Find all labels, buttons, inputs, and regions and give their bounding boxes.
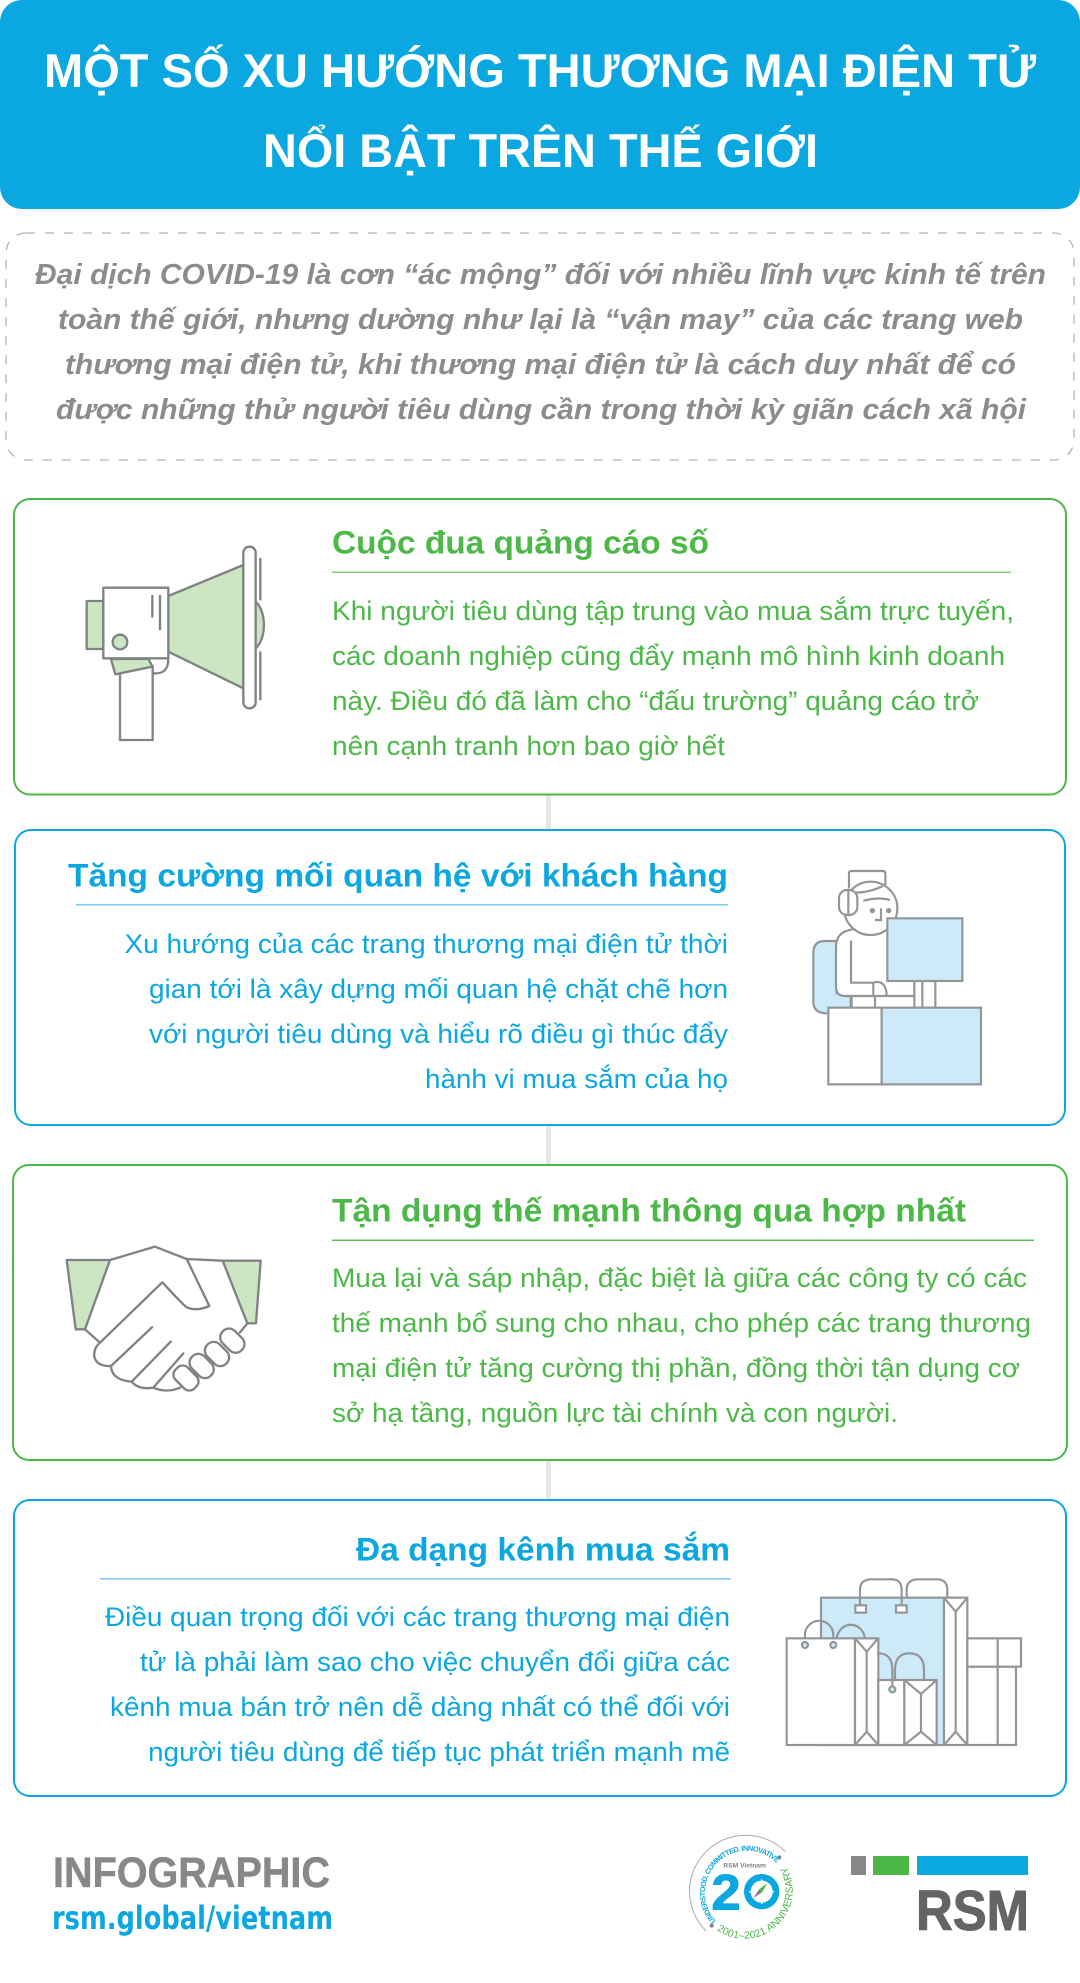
intro panel [6,233,1074,460]
title banner [0,0,1080,209]
icon: support agent at computer [813,871,981,1084]
anniversary badge: UNDERSTOOD. COMMITTED. INNOVATIVE [700,1846,780,1924]
footer: website: rsm.global/vietnam [52,1899,333,1937]
body text: customer relationships: gian tới là xây dựng mối quan hệ chặt chẽ hơn [149,974,728,1004]
anniversary badge: RSM Vietnam [723,1863,766,1870]
panel: leveraging strengths through mergers [13,1165,1067,1460]
body text: leveraging strengths through mergers: sở hạ tầng, nguồn lực tài chính và con người. [332,1398,898,1428]
heading: diversified shopping channels: Đa dạng kênh mua sắm [356,1532,730,1568]
body text: leveraging strengths through mergers: Mua lại và sáp nhập, đặc biệt là giữa các công ty có các [332,1263,1027,1293]
body text: leveraging strengths through mergers: thế mạnh bổ sung cho nhau, cho phép các trang thương [332,1308,1031,1338]
RSM logo [851,1856,1029,1943]
body text: customer relationships: hành vi mua sắm của họ [425,1063,728,1094]
title text: MỘT SỐ XU HƯỚNG THƯƠNG MẠI ĐIỆN TỬ [44,44,1036,97]
heading: leveraging strengths through mergers: Tận dụng thế mạnh thông qua hợp nhất [332,1192,966,1228]
title text: NỔI BẬT TRÊN THẾ GIỚI [263,124,818,177]
body text: digital advertising race: các doanh nghiệp cũng đẩy mạnh mô hình kinh doanh [332,641,1005,671]
body text: digital advertising race: nên cạnh tranh hơn bao giờ hết [332,731,726,761]
body text: customer relationships: với người tiêu dùng và hiểu rõ điều gì thúc đẩy [149,1019,729,1049]
intro text: thương mại điện tử, khi thương mại điện tử là cách duy nhất để có [65,349,1016,381]
body text: digital advertising race: Khi người tiêu dùng tập trung vào mua sắm trực tuyến, [332,595,1014,626]
panel: customer relationships [15,830,1065,1125]
body text: digital advertising race [332,595,1014,761]
body text: diversified shopping channels: người tiêu dùng để tiếp tục phát triển mạnh mẽ [148,1737,730,1767]
heading: digital advertising race: Cuộc đua quảng cáo số [332,524,709,560]
body text: customer relationships [124,929,729,1094]
RSM logo: RSM [916,1879,1029,1943]
icon: shopping bags [787,1579,1021,1745]
intro text: được những thử người tiêu dùng cần trong thời kỳ giãn cách xã hội [56,394,1027,426]
anniversary badge: 2001–2021 ANNIVERSARY [717,1868,793,1939]
panel: digital advertising race [14,499,1066,794]
body text: diversified shopping channels [105,1602,730,1767]
body text: diversified shopping channels: Điều quan trọng đối với các trang thương mại điện [105,1602,730,1632]
title text [44,44,1036,177]
anniversary badge: 2 [711,1864,741,1920]
heading: customer relationships: Tăng cường mối quan hệ với khách hàng [68,858,728,894]
intro text [35,259,1046,426]
anniversary badge [689,1834,793,1939]
panel: diversified shopping channels [14,1500,1066,1796]
icon: megaphone [87,547,264,740]
body text: digital advertising race: này. Điều đó đã làm cho “đấu trường” quảng cáo trở [332,686,979,716]
icon: handshake [67,1247,261,1394]
body text: leveraging strengths through mergers: mại điện tử tăng cường thị phần, đồng thời tận dụng cơ [332,1353,1020,1383]
footer: infographic label: INFOGRAPHIC [53,1849,330,1897]
body text: leveraging strengths through mergers [332,1263,1031,1428]
intro text: toàn thế giới, nhưng dường như lại là “vận may” của các trang web [58,304,1023,336]
body text: diversified shopping channels: tử là phải làm sao cho việc chuyển đổi giữa các [140,1647,730,1677]
body text: diversified shopping channels: kênh mua bán trở nên dễ dàng nhất có thể đối với [110,1691,730,1722]
intro text: Đại dịch COVID-19 là cơn “ác mộng” đối với nhiều lĩnh vực kinh tế trên [35,259,1046,291]
body text: customer relationships: Xu hướng của các trang thương mại điện tử thời [124,929,728,959]
